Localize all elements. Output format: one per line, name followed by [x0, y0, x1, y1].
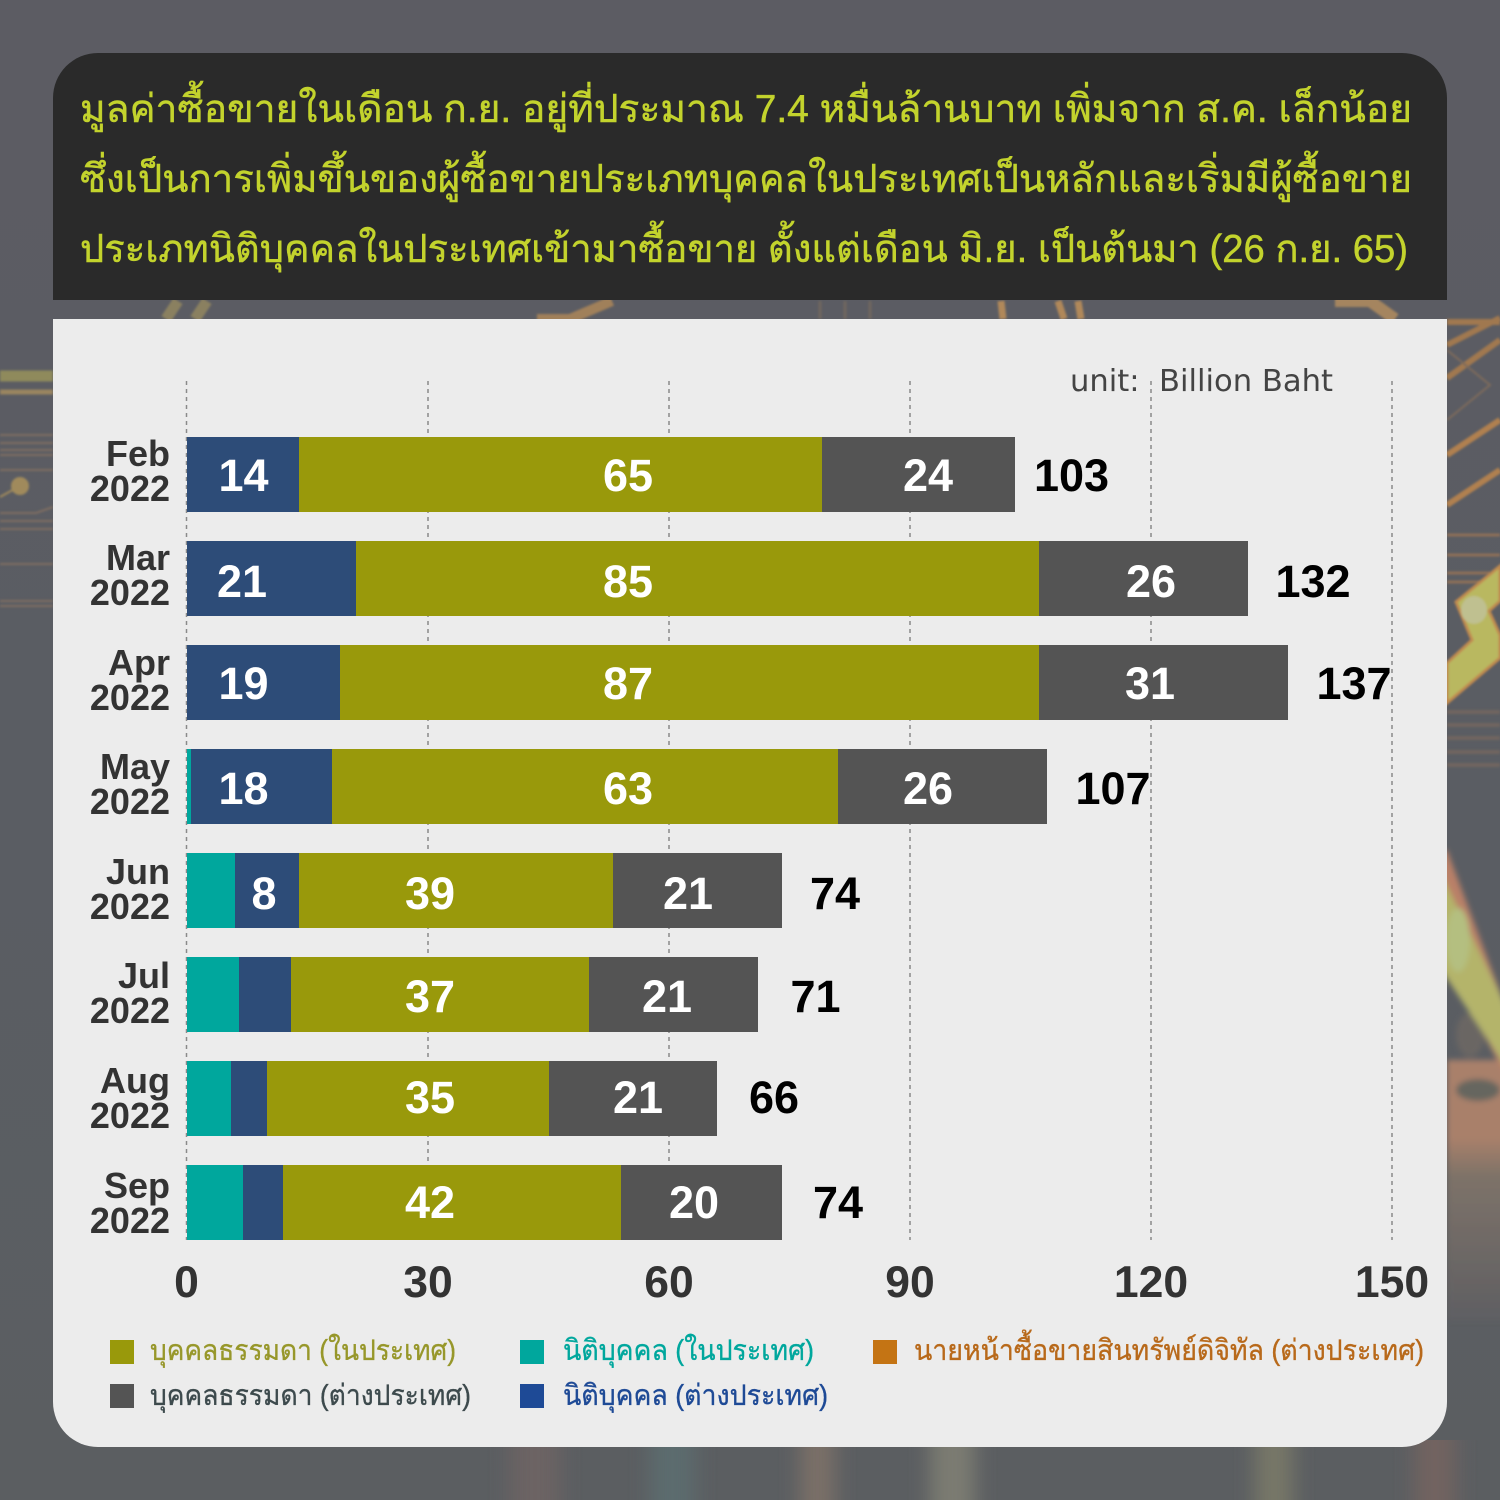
header panel [53, 53, 1447, 300]
row: Apr 2022: 2022 [90, 677, 170, 718]
legend item: juristic foreign: นิติบุคคล (ต่างประเทศ) [563, 1380, 828, 1413]
row: May 2022 [90, 746, 1151, 824]
grid lines [186, 381, 1392, 1240]
row: Jun 2022: 8 [251, 868, 277, 919]
row: Apr 2022: 137 [1316, 658, 1392, 709]
row: Mar 2022: 26 [1126, 556, 1176, 607]
row: Apr 2022: 19 [218, 658, 269, 709]
x axis labels: 60 [644, 1258, 694, 1307]
row: Aug 2022 [90, 1060, 799, 1136]
row: May 2022: 107 [1075, 763, 1151, 814]
row: Feb 2022: 103 [1034, 450, 1109, 501]
x axis labels: 90 [885, 1258, 935, 1307]
row: Aug 2022: 35 [405, 1072, 455, 1123]
row: Jun 2022: Jun [106, 851, 170, 892]
row: Feb 2022: 2022 [90, 468, 170, 509]
legend item: individual foreign: บุคคลธรรมดา (ต่างประเทศ) [150, 1380, 471, 1413]
row: Feb 2022: 14 [218, 450, 269, 501]
background: bottom soft streaks [510, 1440, 1455, 1500]
row: Sep 2022: 20 [669, 1177, 719, 1228]
row: Apr 2022: Apr [108, 642, 170, 683]
row: Mar 2022 [90, 537, 1351, 616]
row: Mar 2022: 85 [603, 556, 653, 607]
unit label: unit: Billion Baht [1070, 364, 1333, 399]
heading text: ซึ่งเป็นการเพิ่มขึ้นของผู้ซื้อขายประเภทบุคคลในประเทศเป็นหลักและเริ่มมีผู้ซื้อขาย [80, 150, 1412, 203]
row: Sep 2022: 42 [405, 1177, 455, 1228]
row: Sep 2022: 2022 [90, 1200, 170, 1241]
row: Jun 2022: 74 [810, 868, 860, 919]
legend item: juristic domestic: นิติบุคคล (ในประเทศ) [563, 1333, 814, 1368]
row: Jul 2022: Jul [118, 955, 170, 996]
bar chart [90, 433, 1392, 1241]
legend [110, 1329, 1424, 1413]
row: Aug 2022: 2022 [90, 1095, 170, 1136]
background: yellow zigzag trace [1447, 566, 1500, 703]
row: Sep 2022 [90, 1165, 863, 1241]
row: Jun 2022: 2022 [90, 886, 170, 927]
row: Apr 2022: 87 [603, 658, 653, 709]
x axis labels: 150 [1355, 1258, 1429, 1307]
row: Sep 2022: 74 [813, 1177, 863, 1228]
row: Jul 2022 [90, 955, 841, 1032]
row: Mar 2022: Mar [106, 537, 170, 578]
row: Aug 2022: 66 [749, 1072, 799, 1123]
row: Mar 2022: 132 [1275, 556, 1351, 607]
row: Sep 2022: Sep [104, 1165, 170, 1206]
row: Mar 2022: 21 [217, 556, 267, 607]
row: Jun 2022 [90, 851, 860, 928]
row: May 2022: 26 [903, 763, 953, 814]
row: Feb 2022: 65 [603, 450, 653, 501]
row: Jul 2022: 21 [642, 971, 692, 1022]
row: Jul 2022: 71 [790, 971, 841, 1022]
legend item: digital asset broker foreign: นายหน้าซื้อขายสินทรัพย์ดิจิทัล (ต่างประเทศ) [914, 1329, 1424, 1367]
row: Jul 2022: 2022 [90, 990, 170, 1031]
background: lower right glow [1440, 850, 1500, 1320]
row: Jun 2022: 39 [405, 868, 455, 919]
row: Aug 2022: 21 [613, 1072, 663, 1123]
row: Apr 2022 [90, 642, 1392, 720]
heading text [80, 80, 1412, 273]
x axis labels: 120 [1114, 1258, 1188, 1307]
row: Mar 2022: 2022 [90, 572, 170, 613]
x axis labels: 0 [174, 1258, 199, 1307]
row: Jul 2022: 37 [405, 971, 455, 1022]
x axis labels: 30 [403, 1258, 453, 1307]
legend item: individual domestic: บุคคลธรรมดา (ในประเทศ) [150, 1333, 456, 1368]
heading text: ประเภทนิติบุคคลในประเทศเข้ามาซื้อขาย ตั้งแต่เดือน มิ.ย. เป็นต้นมา (26 ก.ย. 65) [80, 220, 1408, 273]
x axis labels [174, 1258, 1429, 1307]
row: May 2022: 2022 [90, 781, 170, 822]
background: right-edge circuit [1447, 318, 1500, 765]
chart panel [53, 319, 1447, 1447]
row: May 2022: 63 [603, 763, 653, 814]
row: Apr 2022: 31 [1125, 658, 1175, 709]
heading text: มูลค่าซื้อขายในเดือน ก.ย. อยู่ที่ประมาณ 7.4 หมื่นล้านบาท เพิ่มจาก ส.ค. เล็กน้อย [80, 80, 1412, 132]
row: Feb 2022 [90, 433, 1109, 512]
row: May 2022: May [100, 746, 170, 787]
row: Feb 2022: 24 [903, 450, 953, 501]
row: Jun 2022: 21 [663, 868, 713, 919]
row: Aug 2022: Aug [100, 1060, 170, 1101]
row: May 2022: 18 [218, 763, 269, 814]
row: Feb 2022: Feb [106, 433, 170, 474]
